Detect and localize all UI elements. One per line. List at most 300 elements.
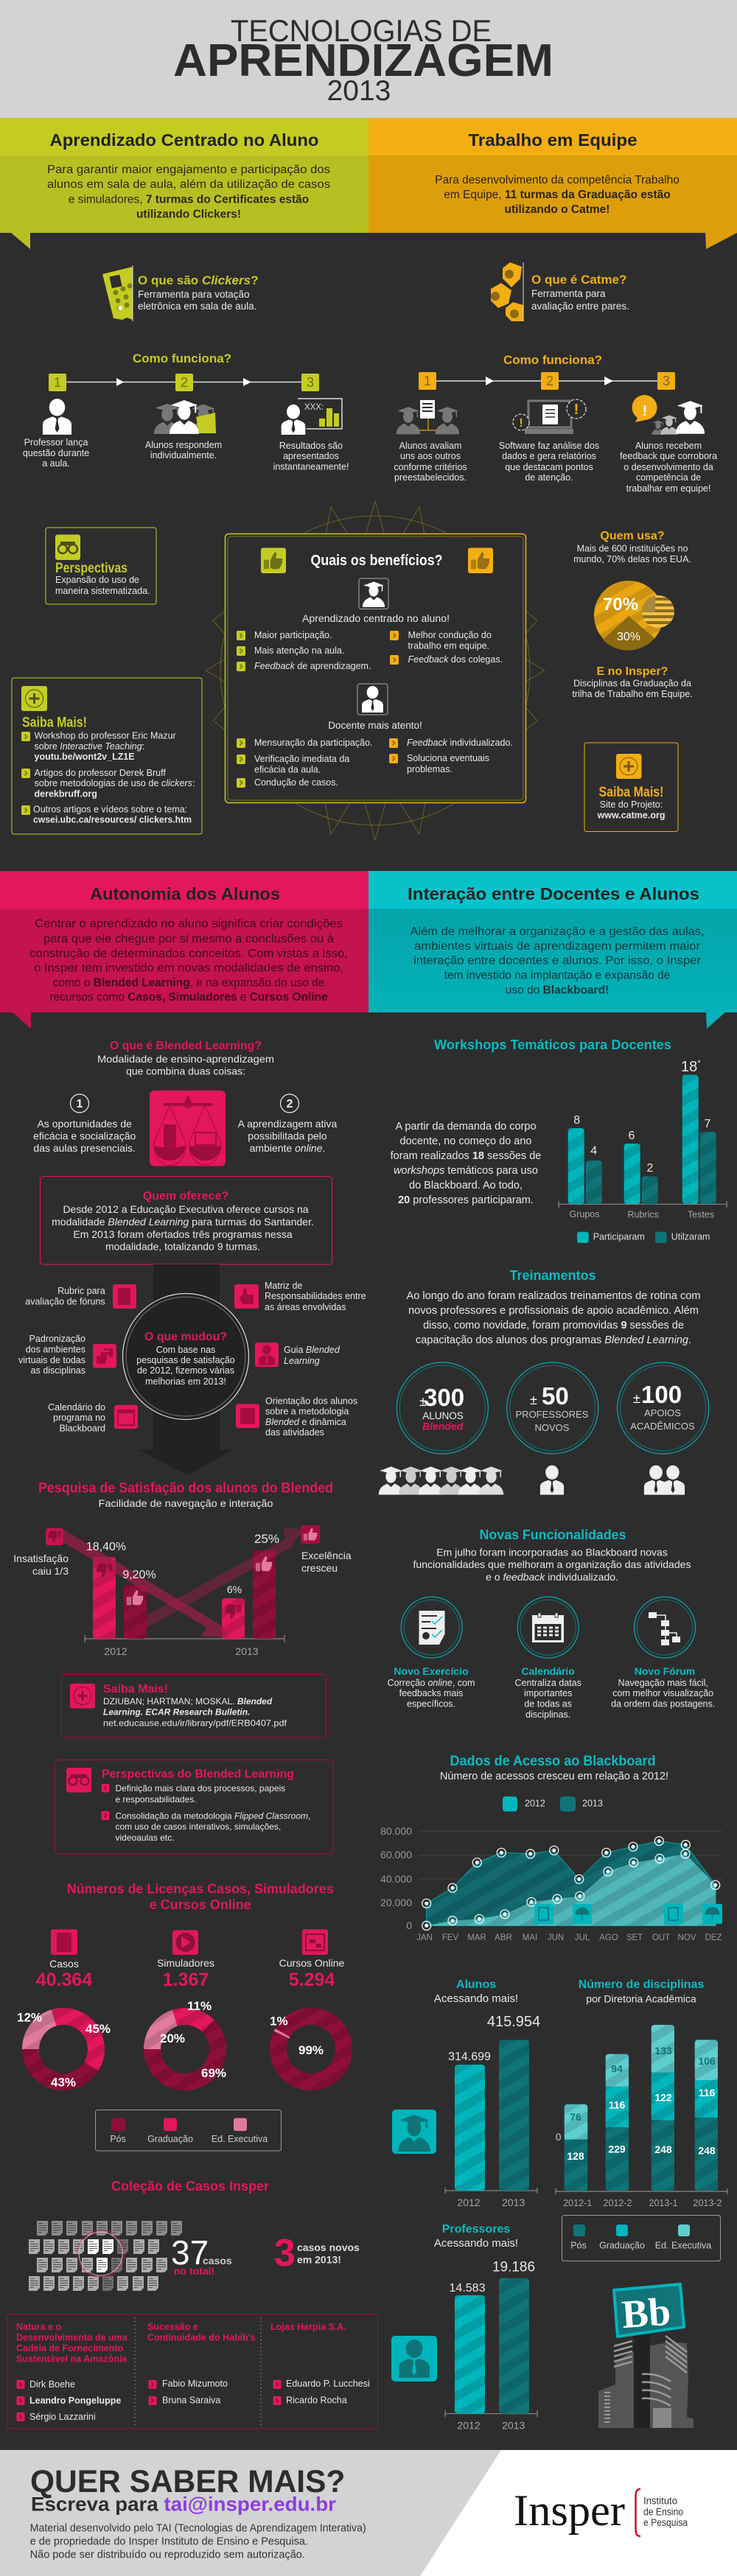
banner: Autonomia dos Alunos: Autonomia dos Alunos [90, 884, 280, 903]
legend: disciplinas: Ed. Executiva [655, 2241, 711, 2251]
captions: step descriptions: de atenção. [525, 472, 573, 483]
chart: donut casos: 12% [17, 2011, 42, 2025]
chart: access area: JAN [416, 1933, 433, 1942]
case: Natura: Dirk Boehe [29, 2379, 75, 2390]
chart: donut casos: 43% [51, 2076, 76, 2090]
stat: 3 casos novos: em 2013! [297, 2254, 341, 2266]
chart: access area: JUL [575, 1933, 590, 1942]
feature: Calendário [515, 1597, 581, 1720]
chart: disciplinas stacked bars: 76 [570, 2111, 581, 2123]
panel: Perspectivas [46, 528, 156, 604]
chart: donut casos [17, 2004, 111, 2094]
case: Natura: Sérgio Lazzarini [29, 2412, 96, 2422]
graphic: grid of 37 case documents [29, 2221, 182, 2291]
item: opportunity 1: 1 [77, 1098, 83, 1110]
panel: Saiba Mais catme [584, 743, 678, 831]
chart: alunos bars: 2012 [457, 2197, 481, 2208]
chart: disciplinas stacked bars: 133 [654, 2045, 672, 2057]
list: teacher benefits: Verificação imediata da [254, 754, 349, 764]
item: Calendário: Calendário do [48, 1402, 105, 1413]
captions: step descriptions: feedback que corrobora [620, 451, 717, 461]
item: Padronização: dos ambientes [26, 1344, 85, 1354]
chart: professores bars: 2013 [502, 2420, 525, 2432]
panel: Quais os benefícios [226, 533, 526, 803]
chart: satisfaction bars: 2012 [104, 1645, 128, 1657]
list: student benefits [237, 630, 503, 671]
banner: Interação entre Docentes e Alunos: uso do Blackboard! [506, 984, 609, 996]
captions: step descriptions: conforme critérios [394, 462, 467, 472]
steps: clickers process arrows [49, 374, 319, 391]
icon: Blackboard building: Bb [621, 2289, 672, 2337]
steps: catme process arrows [419, 372, 675, 390]
case: Lojas Harpia: Ricardo Rocha [286, 2395, 347, 2406]
heading: Como funciona left: Como funciona? [133, 351, 231, 365]
captions: step descriptions: individualmente. [150, 450, 217, 461]
chart: professores bars: 19.186 [492, 2260, 535, 2275]
captions: step descriptions: preestabelecidos. [394, 472, 467, 483]
banner: Aprendizado Centrado no Aluno: Aprendizado Centrado no Aluno [50, 130, 318, 150]
banner: Trabalho em Equipe: Trabalho em Equipe [469, 130, 637, 150]
icon: student box [359, 578, 388, 609]
text: O que são Clickers: O que são Clickers? [138, 273, 258, 287]
banner: Aprendizado Centrado no Aluno [0, 118, 368, 249]
stat circle: 100 apoios: ACADÊMICOS [630, 1421, 695, 1432]
text: Quem usa: Quem usa? [600, 530, 665, 542]
logo: Insper: e Pesquisa [643, 2517, 688, 2528]
heading: Números de Licenças: Números de Licenças Casos, Simuladores [67, 1882, 334, 1897]
feature: Calendário: Centraliza datas [515, 1678, 581, 1688]
chart: donut cursos online: 1% [270, 2015, 288, 2028]
icon: laptop report: ! [519, 417, 523, 430]
feature: Novo Exercício: feedbacks mais [399, 1688, 463, 1698]
circle: O que mudou: Com base nas [156, 1345, 215, 1355]
text: O que são Clickers: eletrônica em sala de aula. [138, 301, 256, 312]
footer background [0, 2450, 737, 2576]
panel: Quem oferece: Quem oferece? [143, 1190, 228, 1203]
circle: O que mudou: O que mudou? [144, 1331, 227, 1343]
icon: students receive feedback: ! [643, 403, 647, 419]
icons: two teachers [644, 1466, 685, 1495]
chart: satisfaction bars: 2013 [235, 1645, 259, 1657]
text: Treinamentos: novos professores e profissionais de apoio acadêmico. Além [408, 1305, 699, 1317]
text: O que é Blended Learning: Modalidade de ensino-aprendizagem [97, 1053, 274, 1065]
text: workshops description: A partir da demanda do corpo [395, 1121, 537, 1133]
panel: Quem oferece [40, 1176, 332, 1264]
bar: 2013-2 [695, 2040, 718, 2191]
logo: Insper [514, 2486, 688, 2536]
legend: workshops: Utilzaram [671, 1232, 710, 1242]
banner: Interação entre Docentes e Alunos: tem investido na implantação e expansão de [444, 970, 670, 981]
icon: binoculars [55, 535, 80, 560]
heading: Workshops: Workshops Temáticos para Docentes [434, 1037, 671, 1052]
panel: Perspectivas do Blended: e responsabilidades. [115, 1794, 197, 1805]
stat circle: 300 alunos: ALUNOS [422, 1410, 464, 1421]
stat circle: 100 apoios: 100 [641, 1381, 682, 1408]
chart: access area: 80.000 [380, 1825, 412, 1837]
steps: clickers process arrows: 2 [181, 375, 188, 390]
stat: Casos: 40.364 [36, 1970, 92, 1990]
heading: Pesquisa de Satisfação: Facilidade de navegação e interação [99, 1497, 273, 1509]
captions: step descriptions: competência de [636, 472, 701, 483]
banner: Interação entre Docentes e Alunos: interação entre docentes e alunos. Por isso, o Insper [413, 955, 701, 967]
stat: Cursos Online: 5.294 [289, 1970, 335, 1990]
text: workshops description: docente, no começo do ano [400, 1135, 531, 1147]
chart: satisfaction bars: Insatisfação [13, 1553, 69, 1564]
banner: Interação entre Docentes e Alunos: Além de melhorar a organização e a gestão das aulas, [410, 925, 705, 938]
text: Novas Funcionalidades: funcionalidades que melhoram a organização das atividades [413, 1558, 691, 1570]
banner: Interação entre Docentes e Alunos: Interação entre Docentes e Alunos [408, 884, 699, 903]
feature: Novo Fórum: Navegação mais fácil, [618, 1678, 708, 1688]
legend: licenças: Ed. Executiva [212, 2134, 268, 2144]
bar: 2013 excelência [253, 1550, 276, 1639]
stat: Cursos Online [279, 1929, 345, 1990]
case: Habib's: Fabio Mizumoto [162, 2379, 228, 2389]
icon: scales [150, 1091, 226, 1166]
panel: Quem oferece: modalidade Blended Learning para turmas do Santander. [52, 1216, 314, 1228]
icon: flag [642, 595, 674, 628]
banner: Interação entre Docentes e Alunos: ambientes virtuais de aprendizagem permitem maior [414, 940, 700, 953]
icon: teacher box [357, 684, 388, 715]
chart: pie 70/30 with flag: 30% [617, 631, 640, 643]
stat: Simuladores: 1.367 [163, 1970, 209, 1990]
chart: workshops bars: 8 [573, 1114, 580, 1127]
icon: thumb down [46, 1528, 63, 1545]
item: opportunity 2: ambiente online. [250, 1142, 325, 1154]
text: Treinamentos: Treinamentos [509, 1268, 596, 1283]
text: E no Insper: E no Insper? [597, 665, 668, 678]
arrow: up trend [147, 1527, 303, 1628]
bar: 2013-1 [652, 2025, 674, 2191]
item: Orientação: Orientação dos alunos [265, 1396, 357, 1406]
footer: call to action: e de propriedade do Insper Instituto de Ensino e Pesquisa. [30, 2536, 308, 2548]
item: Padronização: virtuais de todas [18, 1355, 85, 1365]
icon: Catme gears [491, 262, 523, 321]
text: Novas Funcionalidades: Novas Funcionalidades [479, 1527, 626, 1542]
chart: donut cursos online: 99% [298, 2043, 324, 2057]
text: Treinamentos: capacitação dos alunos dos programas Blended Learning. [416, 1334, 691, 1346]
captions: step descriptions: Alunos avaliam [399, 441, 461, 451]
stat circle: 50 professores: NOVOS [535, 1422, 570, 1433]
stat circle: 300 alunos: 300 [424, 1384, 464, 1411]
panel: Saiba Mais clickers: derekbruff.org [34, 788, 97, 799]
icon: laptop report [513, 399, 586, 434]
item: Calendário: programa no [53, 1413, 105, 1423]
panel: Quem oferece: Desde 2012 a Educação Executiva oferece cursos na [63, 1203, 309, 1215]
chart: disciplinas stacked bars: 2012-2 [604, 2198, 632, 2208]
panel: Perspectivas do Blended: Consolidação da metodologia Flipped Classroom, [115, 1810, 310, 1821]
item: opportunity 1: eficácia e socialização [33, 1130, 136, 1142]
stat: Simuladores [157, 1931, 214, 1990]
footer: call to action: Material desenvolvido pelo TAI (Tecnologias de Aprendizagem Interativa) [30, 2523, 366, 2535]
item: opportunity 1 [33, 1094, 136, 1154]
item: Rubric [25, 1284, 136, 1309]
list: student benefits: Feedback de aprendizagem. [254, 661, 371, 671]
text: Alunos heading: Alunos [456, 1978, 496, 1991]
chart: workshops bars: Grupos [569, 1209, 600, 1219]
list: student benefits: trabalho em equipe. [408, 641, 489, 651]
heading: Dados de Acesso: Dados de Acesso ao Blackboard [450, 1754, 656, 1769]
item: opportunity 2: possibilitada pelo [248, 1130, 327, 1142]
chart: access area: 40.000 [380, 1873, 412, 1885]
circle: O que mudou: pesquisas de satisfação [136, 1355, 235, 1365]
feature: Calendário: de todas as [524, 1699, 572, 1709]
item: Orientação [236, 1396, 357, 1438]
item: Matriz: as áreas envolvidas [265, 1302, 346, 1312]
arrow: down trend [62, 1530, 229, 1637]
panel: Perspectivas do Blended: Perspectivas do Blended Learning [102, 1768, 294, 1780]
list: teacher benefits: Mensuração da participação. [254, 738, 373, 748]
chart: alunos bars: 2013 [502, 2197, 525, 2208]
heading: Pesquisa de Satisfação: Pesquisa de Satisfação dos alunos do Blended [38, 1481, 333, 1497]
panel: Perspectivas do Blended: videoaulas etc. [115, 1833, 175, 1843]
case: Habib's: Sucessão e [147, 2322, 198, 2332]
banner: Aprendizado Centrado no Aluno: alunos em sala de aula, além da utilização de casos [47, 178, 330, 191]
text: workshops description: 20 professores participaram. [398, 1194, 534, 1206]
chart: disciplinas stacked bars [556, 2025, 727, 2208]
steps: clickers process arrows: 1 [54, 375, 61, 390]
text: Número de disciplinas heading: por Diretoria Acadêmica [586, 1992, 696, 2004]
chart: satisfaction bars: 9,20% [122, 1569, 156, 1581]
legend: disciplinas: Pós [570, 2241, 587, 2251]
chart: disciplinas stacked bars: 229 [608, 2143, 626, 2155]
case: Habib's: Bruna Saraiva [162, 2395, 220, 2406]
banner: Autonomia dos Alunos [0, 871, 368, 1029]
banner: Autonomia dos Alunos: como o Blended Learning, e na expansão do uso de [53, 976, 324, 989]
item: Calendário [48, 1402, 138, 1434]
list: student benefits: Maior participação. [254, 630, 332, 640]
chart: disciplinas stacked bars: 2013-1 [649, 2198, 678, 2208]
case: Natura: Sustentável na Amazônia [16, 2354, 128, 2365]
panel: Perspectivas do Blended: Definição mais clara dos processos, papeis [115, 1783, 285, 1793]
chart: satisfaction bars: cresceu [301, 1562, 338, 1574]
chart: satisfaction bars [13, 1525, 352, 1657]
legend: access chart [503, 1796, 603, 1811]
chart: satisfaction bars: 25% [254, 1532, 279, 1546]
captions: step descriptions: trabalhar em equipe! [626, 483, 710, 494]
chart: access area: ABR [495, 1933, 512, 1942]
list: teacher benefits: problemas. [407, 764, 453, 774]
chart: access area: 0 [406, 1919, 412, 1931]
chart: professores bars [445, 2260, 537, 2432]
legend: access chart: 2012 [525, 1799, 545, 1809]
item: Guia Blended: Guia Blended [284, 1345, 340, 1355]
stat: Casos: Casos [49, 1958, 79, 1970]
banner: Aprendizado Centrado no Aluno: Para garantir maior engajamento e participação dos [47, 164, 330, 176]
panel: Saiba Mais catme: www.catme.org [597, 811, 665, 821]
icon: plus pink [70, 1684, 95, 1708]
banner: Aprendizado Centrado no Aluno: utilizando Clickers! [136, 208, 241, 221]
chart: access area: JUN [548, 1933, 564, 1942]
text: Quem usa: Mais de 600 instituições no [577, 544, 688, 554]
decorative star behind benefits [206, 501, 545, 840]
list: teacher benefits: Soluciona eventuais [407, 753, 489, 763]
chart: donut simuladores: 69% [201, 2066, 226, 2080]
item: Matriz: Responsabilidades entre [265, 1291, 366, 1301]
feature: Novo Fórum: Novo Fórum [635, 1665, 695, 1677]
stat circle: 50 professores [507, 1362, 598, 1454]
chart: access area: FEV [442, 1933, 459, 1942]
text: Professores heading: Professores [442, 2223, 510, 2236]
stat circle: 300 alunos: Blended [422, 1421, 464, 1432]
icon: peer evaluation [397, 400, 459, 434]
banner: Trabalho em Equipe: Para desenvolvimento da competência Trabalho [435, 174, 680, 186]
item: opportunity 1: das aulas presenciais. [33, 1142, 136, 1154]
chart: disciplinas stacked bars: 106 [698, 2055, 716, 2067]
captions: step descriptions [23, 438, 717, 494]
chart: alunos bars: 415.954 [487, 2014, 540, 2030]
list: teacher benefits: Feedback individualizado. [407, 738, 513, 748]
icon: professor [43, 399, 71, 435]
icon: results on screen: XXX: [304, 403, 324, 412]
list: student benefits: Melhor condução do [408, 630, 492, 640]
chart: disciplinas stacked bars: 248 [698, 2144, 716, 2156]
case: Lojas Harpia [270, 2322, 370, 2406]
chart: donut simuladores: 20% [160, 2031, 185, 2045]
chart: disciplinas stacked bars: 2012-1 [563, 2198, 592, 2208]
icon: thumb up [301, 1525, 320, 1544]
feature: Calendário: Calendário [522, 1665, 575, 1677]
chart: access area: MAI [523, 1933, 537, 1942]
text: Treinamentos: disso, como novidade, foram promovidas 9 sessões de [423, 1320, 684, 1331]
chart: disciplinas stacked bars: 116 [609, 2099, 626, 2110]
bar: 2013 insatisfação [222, 1598, 245, 1639]
chart: workshops bars: * [697, 1059, 701, 1068]
chart: professores bars: 2012 [457, 2420, 481, 2432]
panel: Saiba Mais clickers: Workshop do professor Eric Mazur [34, 731, 176, 741]
captions: step descriptions: instantaneamente! [273, 461, 349, 472]
captions: step descriptions: apresentados [283, 451, 339, 461]
case: Habib's: Continuidade do Habib's [147, 2333, 256, 2343]
item: Padronização: as disciplinas [31, 1365, 85, 1376]
panel: Saiba Mais blended: Learning. ECAR Research Bulletin. [103, 1707, 250, 1718]
icon: plus orange [616, 754, 641, 779]
list: teacher benefits: eficácia da aula. [254, 765, 321, 775]
panel: Saiba Mais clickers: sobre Interactive Teaching: [34, 741, 144, 752]
case: Lojas Harpia: Eduardo P. Lucchesi [286, 2379, 370, 2389]
list: teacher benefits [237, 738, 513, 788]
captions: step descriptions: Software faz análise dos [499, 441, 599, 451]
chart: professores bars: 14.583 [450, 2282, 486, 2295]
banner: Autonomia dos Alunos: Centrar o aprendizado no aluno significa criar condições [35, 918, 343, 930]
stat circle: 100 apoios [618, 1362, 709, 1454]
legend: disciplinas [562, 2215, 721, 2261]
text: workshops description: workshops temáticos para uso [394, 1165, 538, 1177]
heading: Números de Licenças: e Cursos Online [150, 1897, 251, 1912]
case: Lojas Harpia: Lojas Harpia S.A. [270, 2322, 346, 2332]
list: student benefits: Feedback dos colegas. [408, 654, 503, 665]
text: workshops description: foram realizados 18 sessões de [391, 1150, 541, 1162]
panel: Perspectivas do Blended [55, 1760, 333, 1854]
item: Rubric: Rubric para [57, 1286, 105, 1296]
case: Natura: Cadeia de Fornecimento [16, 2343, 124, 2353]
chart: workshops bars: 6 [629, 1130, 635, 1142]
panel: Saiba Mais clickers: Saiba Mais! [22, 715, 87, 731]
markers: data points [422, 1837, 720, 1930]
chart: access area: OUT [652, 1933, 670, 1942]
captions: step descriptions: Professor lança [24, 438, 88, 448]
legend: licenças: Pós [110, 2134, 126, 2144]
header: title: 2013 [327, 75, 391, 107]
stat circle: 50 professores: PROFESSORES [516, 1409, 589, 1420]
heading: Dados de Acesso: Número de acessos cresceu em relação a 2012! [440, 1771, 668, 1782]
banner: Aprendizado Centrado no Aluno: e simuladores, 7 turmas do Certificates estão [69, 193, 309, 206]
feature: Novo Exercício: Correção online, com [388, 1678, 475, 1688]
chart: disciplinas stacked bars: 2013-2 [694, 2198, 722, 2208]
area: 2013 [427, 1841, 716, 1926]
stat: Cursos Online: Cursos Online [279, 1957, 345, 1969]
header: title: TECNOLOGIAS DE [231, 13, 492, 48]
header: title: APRENDIZAGEM [173, 35, 553, 86]
item: Guia Blended: Learning [284, 1356, 320, 1366]
text: workshops description: do Blackboard. Ao todo, [409, 1180, 523, 1191]
panel: Saiba Mais blended: Saiba Mais! [103, 1683, 168, 1695]
footer: call to action: Não pode ser distribuído ou reproduzido sem autorização. [30, 2549, 305, 2561]
text: Treinamentos: Ao longo do ano foram realizados treinamentos de rotina com [407, 1290, 700, 1302]
footer: call to action: Escreva para tai@insper.edu.br [31, 2493, 336, 2516]
chart: disciplinas stacked bars: 248 [654, 2143, 672, 2155]
feature: Novo Fórum: da ordem das postagens. [611, 1699, 715, 1709]
circle: O que mudou: de 2012, fizemos várias [137, 1365, 234, 1376]
item: Padronização: Padronização [29, 1334, 85, 1344]
item: opportunity 2 [238, 1094, 338, 1154]
feature: Novo Exercício [388, 1597, 475, 1709]
case: Habib's [147, 2322, 256, 2406]
text: Novas Funcionalidades: Em julho foram incorporadas ao Blackboard novas [436, 1546, 668, 1558]
captions: step descriptions: Alunos recebem [635, 441, 702, 451]
stat: 37 casos: 37 [171, 2233, 209, 2272]
item: opportunity 1: As oportunidades de [37, 1118, 132, 1130]
legend: licenças: Graduação [147, 2134, 193, 2144]
panel: Perspectivas: Perspectivas [55, 561, 128, 576]
text: Número de disciplinas heading: Número de disciplinas [579, 1978, 704, 1991]
panel: Saiba Mais clickers: Outros artigos e vídeos sobre o tema: [33, 805, 187, 815]
icons: event markers [534, 1904, 722, 1924]
legend: workshops: Participaram [593, 1232, 645, 1242]
panel: Saiba Mais blended: DZIUBAN; HARTMAN; MOSKAL. Blended [103, 1696, 272, 1707]
banner: Trabalho em Equipe [368, 118, 737, 249]
text: O que é Blended Learning: O que é Blended Learning? [110, 1040, 262, 1052]
captions: step descriptions: questão durante [23, 448, 89, 458]
banner: Interação entre Docentes e Alunos [368, 871, 737, 1029]
text: Quem usa: mundo, 70% delas nos EUA. [573, 554, 691, 564]
item: Calendário: Blackboard [59, 1424, 105, 1434]
item: Guia Blended [255, 1343, 340, 1367]
stat: 3 casos novos: casos novos [297, 2241, 360, 2253]
header: title [0, 0, 737, 118]
case: Natura: Natura e o [16, 2322, 61, 2332]
stat circle: 50 professores: ± [530, 1393, 537, 1407]
icon: thumb orange [468, 548, 493, 573]
steps: catme process arrows: 2 [546, 374, 553, 388]
panel: Perspectivas: maneira sistematizada. [55, 586, 150, 596]
chart: workshops bars: Testes [688, 1210, 714, 1220]
chart: disciplinas stacked bars: 122 [654, 2091, 672, 2103]
icon: plus green [21, 686, 47, 711]
stat: 37 casos: casos [203, 2255, 232, 2267]
panel: Saiba Mais blended [62, 1674, 326, 1737]
panel: Saiba Mais clickers: Artigos do professor Derek Bruff [34, 768, 166, 778]
captions: step descriptions: uns aos outros [400, 451, 461, 461]
chart: satisfaction bars: Excelência [301, 1550, 352, 1561]
item: Orientação: das atividades [265, 1427, 324, 1438]
icon: teacher [540, 1466, 564, 1495]
heading: Coleção de Casos Insper: Coleção de Casos Insper [111, 2179, 269, 2194]
panel: Saiba Mais clickers [12, 678, 202, 834]
bar: 2012-2 [606, 2054, 629, 2191]
chart: alunos bars: 314.699 [448, 2051, 491, 2063]
chart: access area: MAR [467, 1933, 486, 1942]
footer: call to action: QUER SABER MAIS? [30, 2465, 345, 2499]
